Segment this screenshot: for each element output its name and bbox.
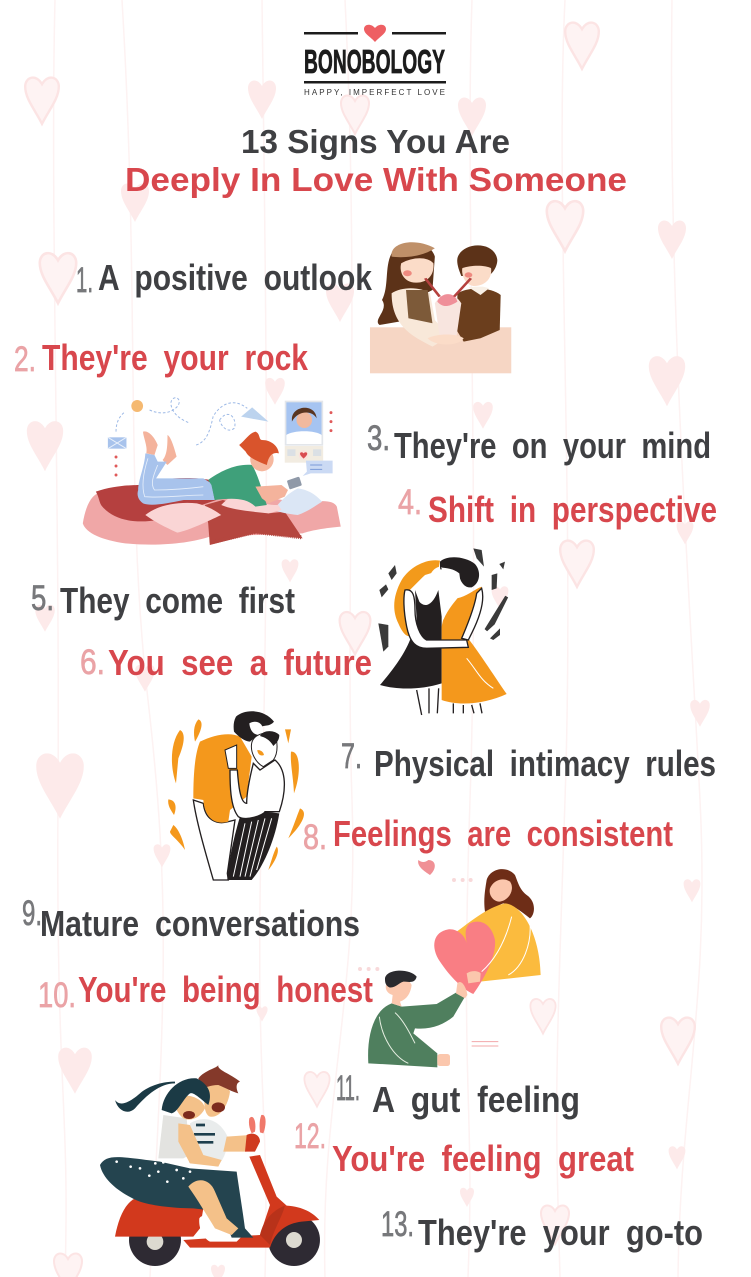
sign 10: You're being honest [78,969,373,1010]
illustration: two women embracing [378,548,507,715]
sign 2: 2. [14,340,36,379]
illustration: two men embracing [168,711,304,880]
illustration: couple on a scooter [100,1065,320,1266]
title: Deeply In Love With Someone [125,161,627,198]
sign 12 [294,1117,634,1179]
logo: Bonobology [304,25,446,97]
sign 5: They come first [60,580,295,621]
sign 3: 3. [367,419,390,458]
icon: logo heart [364,25,386,42]
sign 13: They're your go-to [418,1212,703,1253]
sign 6: 6. [80,643,105,682]
sign 6: You see a future [108,642,372,683]
sign 10 [38,969,373,1015]
sign 7: 7. [341,737,362,776]
title: 13 Signs You Are [241,123,510,160]
sign 9: 9. [22,894,42,933]
sign 5: 5. [31,579,54,618]
sign 11 [336,1069,580,1120]
sign 9 [22,894,360,944]
title [125,123,627,198]
sign 13: 13. [381,1205,414,1244]
logo: Bonobology: HAPPY, IMPERFECT LOVE [304,88,445,97]
sign 9: Mature conversations [40,903,360,944]
illustration: woman on bed texting [83,398,341,545]
logo: Bonobology: BONOBOLOGY [304,43,445,80]
sign 13 [381,1205,703,1253]
sign 2: They're your rock [42,337,309,378]
sign 10: 10. [38,976,76,1015]
sign 12: You're feeling great [332,1138,634,1179]
sign 12: 12. [294,1117,326,1156]
sign 1: 1. [76,261,93,300]
illustration: couple sharing a milkshake [370,242,511,373]
sign 8: 8. [303,818,327,857]
sign 4: 4. [398,483,422,522]
sign 8: Feelings are consistent [333,813,673,854]
sign 11: 11. [336,1069,360,1108]
sign 1: A positive outlook [98,257,373,298]
illustration: couple exchanging a heart [358,860,541,1067]
sign 11: A gut feeling [372,1079,580,1120]
